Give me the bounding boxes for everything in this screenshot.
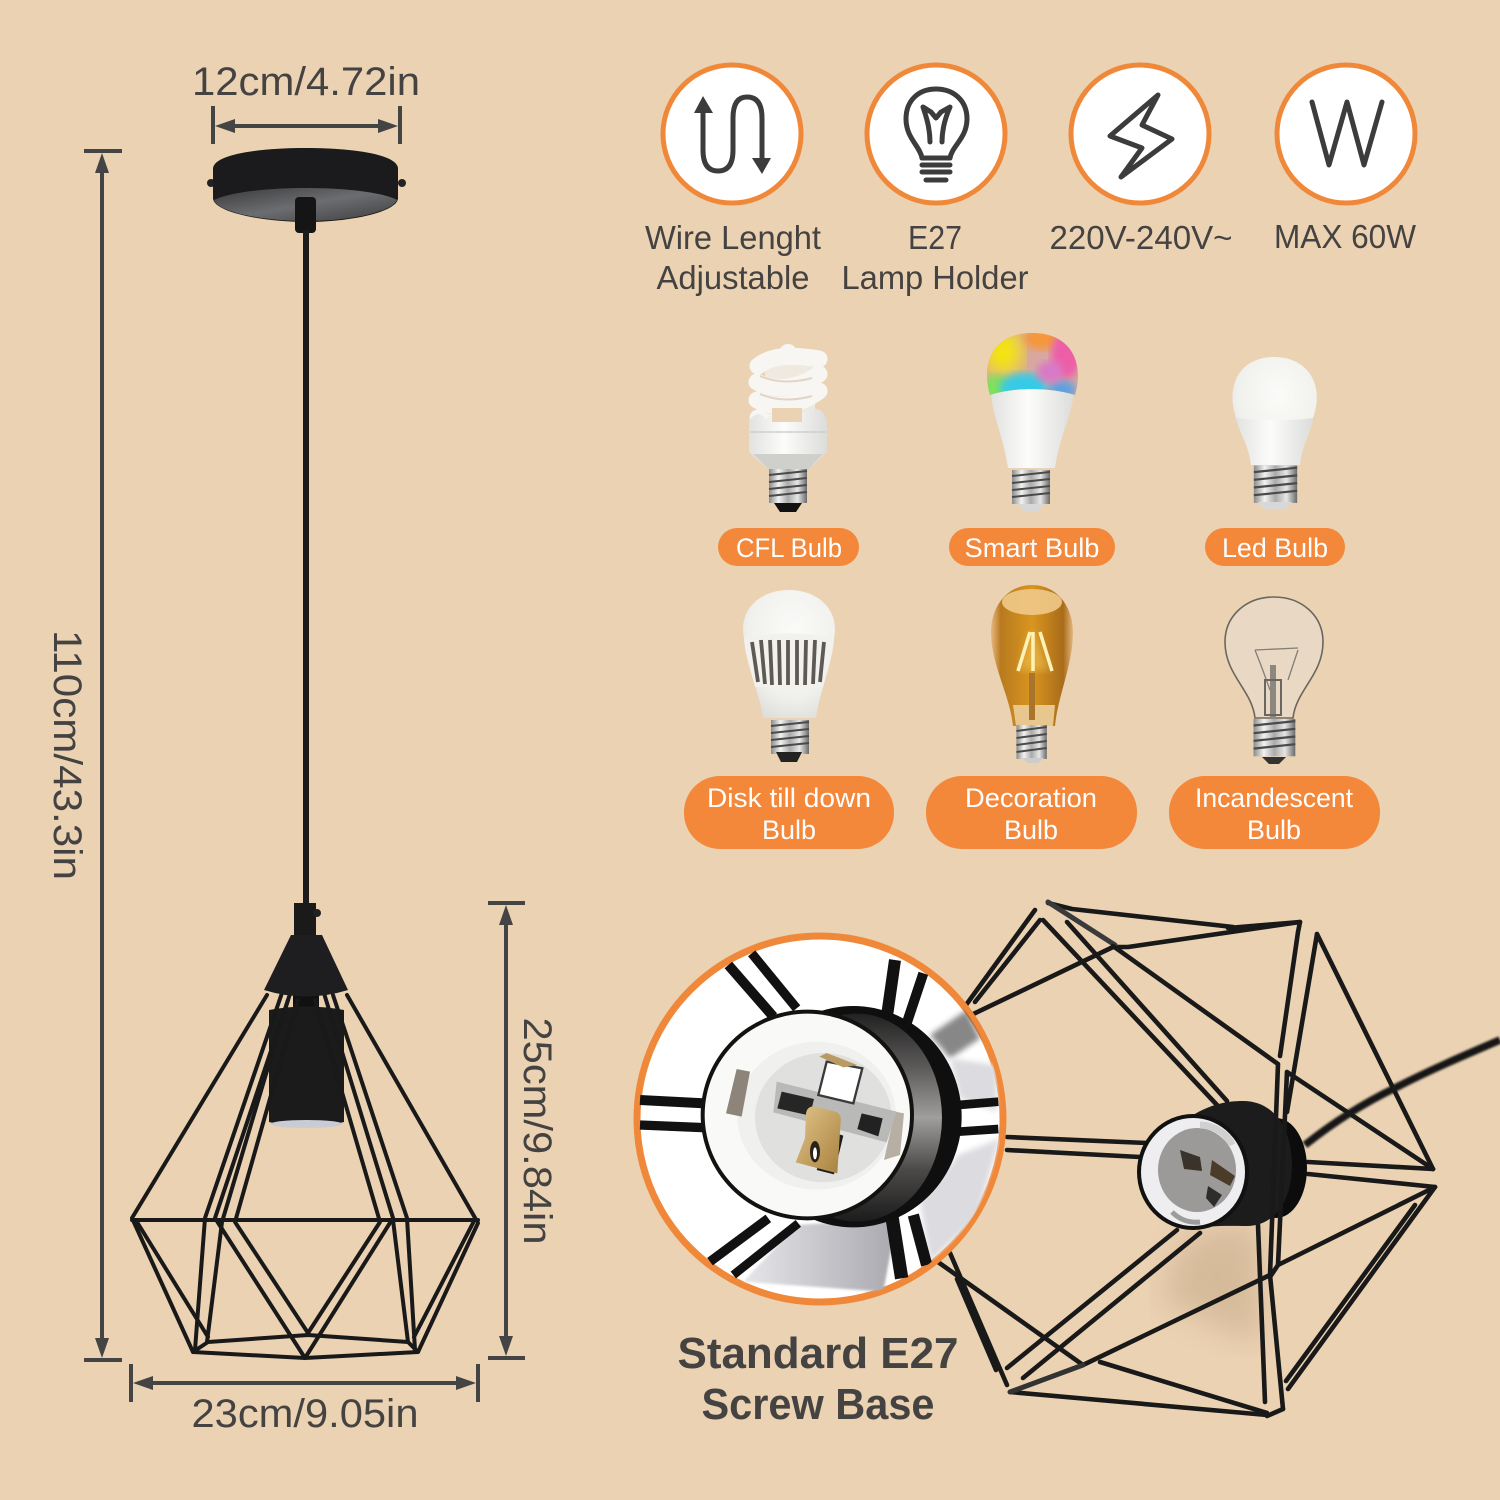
feature: E27 lamp holder bbox=[842, 65, 1029, 296]
icon: light bulb bbox=[906, 89, 967, 180]
gold contact bbox=[796, 1107, 843, 1174]
dimension: canopy width: 12cm/4.72in bbox=[192, 60, 420, 104]
pill: Incandescent Bulb bbox=[1169, 776, 1380, 849]
clear glass bulb image bbox=[1225, 597, 1323, 764]
dimension: cage height: 25cm/9.84in bbox=[515, 1018, 559, 1244]
lamp socket bbox=[269, 985, 344, 1128]
bulb: CFL bbox=[718, 344, 859, 566]
socket body bbox=[1193, 1101, 1307, 1230]
dimension: total height: 110cm/43.3in bbox=[45, 630, 89, 880]
amber filament bulb image bbox=[991, 585, 1073, 763]
power cord bbox=[303, 230, 309, 906]
label: Adjustable bbox=[656, 259, 810, 296]
pill: Disk till down Bulb bbox=[684, 776, 894, 849]
disk bulb image bbox=[743, 590, 835, 762]
wire frame back bbox=[938, 903, 1435, 1415]
pill: CFL Bulb bbox=[718, 528, 859, 566]
label: 220V-240V~ bbox=[1050, 219, 1232, 256]
feature: wire length adjustable bbox=[645, 65, 821, 296]
pill: Smart Bulb bbox=[949, 528, 1115, 566]
lamp neck and cone bbox=[264, 903, 348, 996]
pill: Decoration Bulb bbox=[926, 776, 1137, 849]
bulb: Incandescent bbox=[1169, 597, 1380, 849]
pill: Incandescent Bulb: Incandescent bbox=[1195, 783, 1353, 813]
bulb: Decoration bbox=[926, 585, 1137, 849]
LED bulb image bbox=[1232, 357, 1317, 510]
feature: max wattage bbox=[1274, 65, 1417, 255]
black wires bbox=[640, 953, 998, 1278]
wire frame front bbox=[1010, 902, 1300, 1416]
bulb: Smart bbox=[949, 326, 1115, 566]
cast shadow bbox=[1160, 1222, 1262, 1345]
dimension: cage width: 23cm/9.05in bbox=[192, 1392, 418, 1436]
smart RGB bulb image bbox=[987, 333, 1078, 511]
label: Wire Lenght bbox=[645, 219, 821, 256]
feature: voltage bbox=[1050, 65, 1232, 256]
socket white face bbox=[701, 1010, 914, 1220]
pill: Decoration Bulb: Decoration bbox=[965, 783, 1097, 813]
dimension: cage height bbox=[488, 903, 559, 1358]
pill: Incandescent Bulb: Bulb bbox=[1247, 815, 1301, 845]
lamp cage lying on side bbox=[938, 902, 1500, 1416]
pill: Led Bulb: Led Bulb bbox=[1222, 533, 1328, 563]
dimension: canopy width bbox=[192, 60, 420, 144]
pill: Decoration Bulb: Bulb bbox=[1004, 815, 1058, 845]
dimension: cage width bbox=[131, 1364, 478, 1436]
bulb: LED bbox=[1205, 357, 1345, 566]
caption: Standard E27 Screw Base: Screw Base bbox=[702, 1380, 934, 1429]
socket face bbox=[1137, 1114, 1249, 1230]
power cable bbox=[1305, 1040, 1500, 1145]
bulb: Disk till down bbox=[684, 590, 894, 849]
caption: Standard E27 Screw Base: Standard E27 bbox=[678, 1329, 958, 1378]
silver collar bbox=[832, 1014, 942, 1222]
reflections bbox=[743, 1010, 1000, 1292]
magnifier detail: socket close-up bbox=[637, 936, 1003, 1302]
pill: Led Bulb bbox=[1205, 528, 1345, 566]
dimension: total height bbox=[45, 151, 122, 1360]
label: Lamp Holder bbox=[842, 259, 1029, 296]
pill: Disk till down Bulb: Disk till down bbox=[707, 783, 871, 813]
socket back ring bbox=[814, 1006, 962, 1228]
icon: up and down arrows wire bbox=[694, 96, 771, 174]
label: E27 bbox=[908, 219, 962, 256]
CFL bulb image bbox=[749, 344, 827, 512]
pendant lamp front view bbox=[132, 148, 478, 1358]
wire cage bbox=[132, 988, 478, 1358]
pill: Smart Bulb: Smart Bulb bbox=[964, 533, 1100, 563]
pill: CFL Bulb: CFL Bulb bbox=[736, 533, 842, 563]
label: MAX 60W bbox=[1274, 218, 1417, 255]
pill: Disk till down Bulb: Bulb bbox=[762, 815, 816, 845]
icon: W bbox=[1312, 102, 1382, 165]
icon: lightning bolt bbox=[1110, 95, 1172, 177]
ceiling canopy bbox=[207, 148, 406, 233]
